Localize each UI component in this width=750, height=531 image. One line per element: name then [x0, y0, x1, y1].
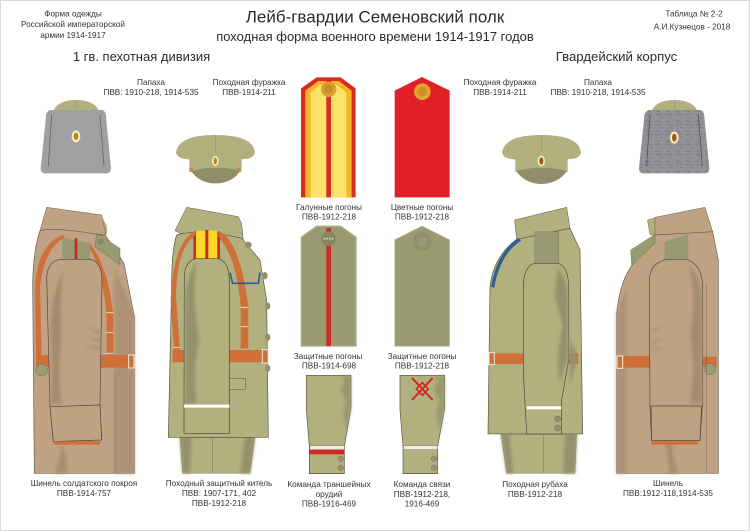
- captions: bottom left garments: ПВВ-1914-757: [57, 489, 112, 498]
- captions: bottom left garments: Шинель солдатского покроя: [31, 479, 137, 488]
- captions: top boards: ПВВ-1912-218: [395, 212, 450, 222]
- captions: protective boards: Защитные погоны: [388, 352, 456, 361]
- caption: greatcoat right: [623, 479, 713, 498]
- series label: Форма одежды: [44, 10, 102, 18]
- caption: cap right: Походная фуражка: [464, 78, 537, 87]
- caption: trench guns: орудий: [316, 490, 342, 499]
- captions: protective boards: Защитные погоны: [294, 352, 362, 361]
- caption: signals: [394, 480, 450, 508]
- caption: cap left: ПВВ-1914-211: [222, 88, 276, 97]
- caption: cap right: [464, 78, 537, 97]
- caption: papakha right: ПВВ: 1910-218, 1914-535: [550, 88, 646, 97]
- caption: signals: ПВВ-1912-218,: [394, 490, 450, 499]
- caption: papakha left: Папаха: [137, 78, 165, 87]
- field shirt right: [488, 207, 583, 473]
- subtitle: походная форма военного времени 1914-1917 годов: [216, 29, 534, 44]
- caption: papakha right: [550, 78, 646, 97]
- greatcoat left: [33, 207, 134, 473]
- table number: Таблица № 2-2: [665, 10, 723, 18]
- caption: tunic: [166, 479, 272, 508]
- icon: right papakha: [639, 100, 709, 173]
- sleeve: signals command: [400, 375, 445, 474]
- caption: greatcoat right: Шинель: [653, 479, 683, 488]
- field tunic left: [168, 207, 270, 473]
- caption: papakha left: ПВВ: 1910-218, 1914-535: [103, 88, 199, 97]
- captions: bottom left garments: [31, 479, 137, 498]
- protective board right: [395, 226, 449, 346]
- captions: top boards: Цветные погоны: [391, 203, 453, 212]
- greatcoat right: [617, 207, 718, 473]
- series label: [21, 10, 125, 40]
- captions: protective boards: [294, 352, 456, 370]
- coloured shoulder board: [395, 77, 450, 197]
- galloon shoulder board: [301, 77, 356, 197]
- captions: top boards: [296, 203, 453, 222]
- icon: right field cap: [502, 135, 581, 184]
- caption: trench guns: Команда траншейных: [287, 480, 371, 489]
- table number: [654, 10, 731, 32]
- caption: cap left: [213, 78, 286, 97]
- series label: Российской императорской: [21, 20, 125, 29]
- caption: trench guns: [287, 480, 371, 508]
- captions: top boards: ПВВ-1912-218: [302, 212, 357, 222]
- captions: top boards: Галунные погоны: [296, 203, 362, 212]
- caption: signals: Команда связи: [394, 480, 450, 489]
- caption: tunic: Походный защитный китель: [166, 479, 272, 488]
- caption: tunic: ПВВ-1912-218: [192, 499, 247, 508]
- caption: tunic: ПВВ: 1907-171, 402: [182, 489, 257, 498]
- captions: protective boards: ПВВ-1914-698: [302, 362, 357, 370]
- protective board left: [301, 226, 356, 346]
- series label: армии 1914-1917: [40, 31, 106, 40]
- caption: trench guns: ПВВ-1916-469: [302, 500, 357, 508]
- caption: cap left: Походная фуражка: [213, 78, 286, 87]
- caption: papakha right: Папаха: [584, 78, 612, 87]
- sleeve: trench guns command: [306, 375, 351, 474]
- captions: protective boards: ПВВ-1912-218: [395, 362, 450, 370]
- caption: shirt: Походная рубаха: [502, 480, 568, 489]
- title: Лейб-гвардии Семеновский полк: [246, 8, 505, 26]
- left division heading: 1 гв. пехотная дивизия: [73, 49, 210, 64]
- icon: left field cap: [176, 135, 255, 183]
- caption: papakha left: [103, 78, 199, 97]
- right division heading: Гвардейский корпус: [556, 49, 678, 64]
- caption: greatcoat right: ПВВ:1912-118,1914-535: [623, 489, 713, 498]
- icon: left papakha: [41, 100, 111, 173]
- caption: cap right: ПВВ-1914-211: [473, 88, 527, 97]
- caption: signals: 1916-469: [405, 500, 440, 508]
- caption: shirt: ПВВ-1912-218: [508, 490, 563, 499]
- table number: А.И.Кузнецов - 2018: [654, 22, 731, 32]
- caption: shirt: [502, 480, 568, 499]
